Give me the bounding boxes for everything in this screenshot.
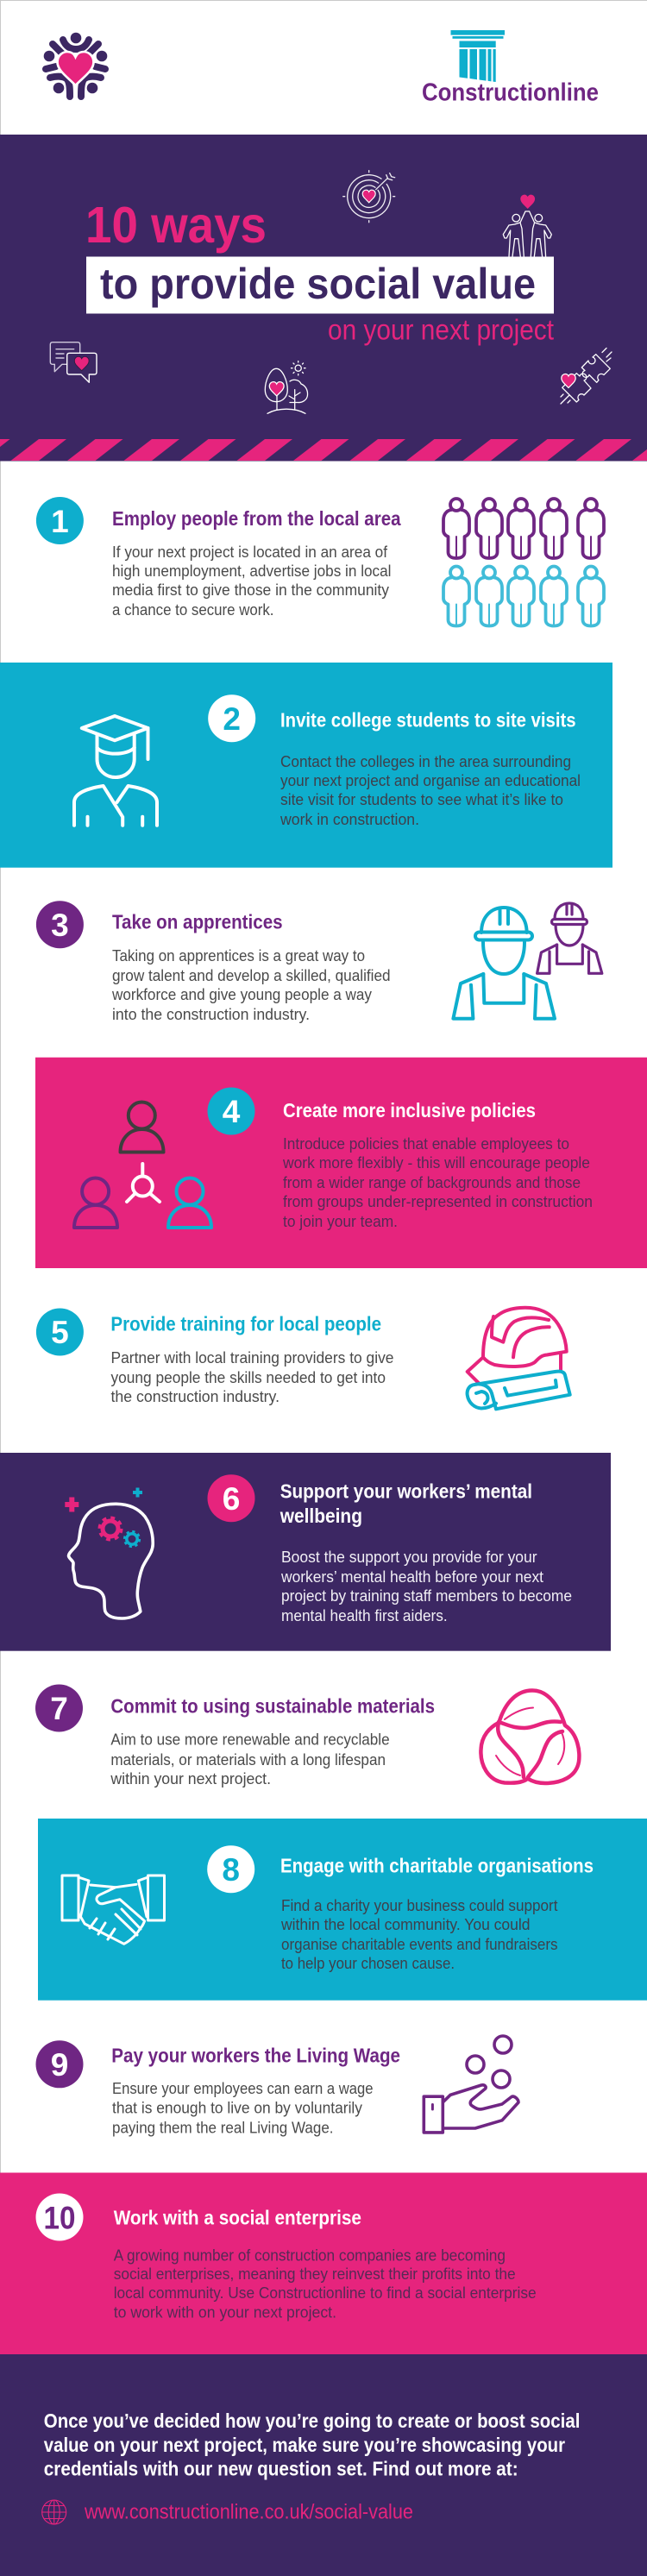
logo: Constructionline — [422, 30, 599, 106]
badge 4 — [207, 1087, 255, 1135]
icon: recycled leaves — [481, 1691, 579, 1783]
heading 2: Invite college students to site visits — [280, 709, 576, 732]
body 10: local community. Use Constructionline to find a social enterprise — [114, 2284, 537, 2302]
body 2: your next project and organise an educational — [280, 771, 581, 789]
panel: step 5 — [36, 1308, 570, 1409]
icon: construction workers — [453, 903, 602, 1019]
body 8: Find a charity your business could support — [281, 1896, 557, 1914]
logo: community heart — [44, 33, 107, 97]
badge 5 — [36, 1308, 84, 1356]
body 9: that is enough to live on by voluntarily — [112, 2098, 363, 2116]
heading 9: Pay your workers the Living Wage — [111, 2045, 400, 2067]
body 5 — [110, 1348, 393, 1405]
footer text: Once you’ve decided how you’re going to create or boost social — [44, 2410, 580, 2432]
body 9: Ensure your employees can earn a wage — [112, 2079, 373, 2097]
body 2 — [280, 752, 581, 828]
badge 6 — [207, 1474, 255, 1522]
body 1: media first to give those in the community — [112, 581, 390, 599]
panel: step 4 — [35, 1058, 647, 1268]
body 4: work more flexibly - this will encourage people — [282, 1153, 590, 1172]
body 7: Aim to use more renewable and recyclable — [110, 1731, 390, 1749]
body 6 — [280, 1548, 572, 1624]
body 10: social enterprises, meaning they reinvest their profits into the — [114, 2265, 516, 2283]
body 8: within the local community. You could — [280, 1915, 530, 1933]
badge 7 — [35, 1684, 83, 1732]
body 5: Partner with local training providers to give — [110, 1348, 393, 1367]
panel: footer — [0, 2354, 647, 2576]
body 2: site visit for students to see what it’s like to — [280, 790, 563, 808]
badge 3: 3 — [51, 908, 69, 943]
footer text: credentials with our new question set. Find out more at: — [44, 2458, 518, 2480]
hazard stripes — [0, 439, 647, 461]
footer text — [44, 2410, 580, 2480]
icon: puzzle — [561, 349, 612, 404]
body 7 — [110, 1731, 390, 1787]
body 10: A growing number of construction companies are becoming — [114, 2246, 506, 2264]
body 3: Taking on apprentices is a great way to — [112, 946, 365, 964]
body 3: workforce and give young people a way — [111, 985, 373, 1003]
body 4 — [282, 1134, 593, 1230]
title box: to provide social value — [100, 260, 536, 308]
body 1 — [112, 543, 392, 619]
heading 3: Take on apprentices — [112, 911, 283, 933]
badge 10: 10 — [43, 2200, 76, 2236]
panel: step 3 — [36, 901, 602, 1023]
icon: target — [343, 171, 395, 223]
heading 4: Create more inclusive policies — [283, 1099, 536, 1122]
body 3 — [111, 946, 391, 1023]
body 6: project by training staff members to become — [281, 1586, 572, 1605]
body 9 — [112, 2079, 373, 2136]
body 10 — [114, 2246, 537, 2321]
body 4: from groups under-represented in construction — [283, 1192, 593, 1210]
icon: trees — [265, 361, 308, 413]
link: www.constructionline.co.uk/social-value — [84, 2500, 413, 2524]
body 4: to join your team. — [283, 1212, 398, 1230]
panel: step 2 — [0, 663, 612, 868]
icon: handshake — [62, 1875, 164, 1944]
icon: graduate — [74, 716, 157, 826]
badge 1 — [36, 497, 84, 544]
heading 6 — [280, 1480, 532, 1527]
badge 7: 7 — [50, 1691, 68, 1726]
heading 6: wellbeing — [280, 1505, 362, 1527]
body 7: materials, or materials with a long lifespan — [110, 1750, 386, 1769]
panel: step 9 — [36, 2036, 518, 2136]
panel: step 10 — [0, 2172, 647, 2354]
badge 2 — [208, 694, 255, 742]
body 5: young people the skills needed to get into — [110, 1368, 386, 1386]
footer text: value on your next project, make sure you’re showcasing your — [44, 2434, 565, 2456]
heading 8: Engage with charitable organisations — [280, 1855, 594, 1877]
panel: step 8 — [38, 1819, 647, 2001]
heading 10: Work with a social enterprise — [114, 2206, 361, 2228]
body 8 — [280, 1896, 557, 1972]
logo: Constructionline: Constructionline — [422, 79, 599, 106]
panel: step 6 — [0, 1453, 611, 1651]
badge 3 — [36, 901, 84, 948]
badge 9: 9 — [51, 2047, 68, 2083]
badge 4: 4 — [223, 1094, 241, 1129]
title: 10 ways: 10 ways — [85, 197, 267, 254]
heading 6: Support your workers’ mental — [280, 1480, 532, 1503]
body 6: Boost the support you provide for your — [281, 1548, 537, 1566]
icon: globe — [42, 2500, 66, 2524]
body 3: into the construction industry. — [112, 1005, 310, 1023]
badge 5: 5 — [51, 1315, 69, 1350]
body 8: to help your chosen cause. — [281, 1954, 455, 1972]
badge 1: 1 — [51, 504, 69, 539]
heading 5: Provide training for local people — [110, 1313, 381, 1335]
badge 6: 6 — [223, 1481, 240, 1517]
heading 1: Employ people from the local area — [112, 507, 401, 530]
body 9: paying them the real Living Wage. — [112, 2118, 333, 2136]
panel: step 7 — [35, 1684, 579, 1787]
body 1: If your next project is located in an area of — [112, 543, 388, 561]
body 2: Contact the colleges in the area surrounding — [280, 752, 571, 770]
subtitle: on your next project — [328, 314, 554, 346]
badge 8: 8 — [222, 1852, 240, 1888]
body 4: from a wider range of backgrounds and those — [283, 1173, 581, 1191]
body 4: Introduce policies that enable employees to — [283, 1134, 569, 1153]
badge 2: 2 — [223, 701, 241, 737]
icon: speech bubbles — [50, 342, 97, 382]
icon: high five — [503, 195, 551, 257]
icon: hard hat and plans — [468, 1308, 570, 1409]
body 6: workers’ mental health before your next — [280, 1568, 543, 1586]
body 2: work in construction. — [280, 810, 419, 828]
body 10: to work with on your next project. — [114, 2303, 336, 2321]
badge 8 — [207, 1845, 254, 1893]
body 8: organise charitable events and fundraisers — [281, 1935, 557, 1953]
panel: hero — [0, 135, 647, 461]
heading 7: Commit to using sustainable materials — [110, 1695, 435, 1718]
panel: step 1 — [36, 497, 604, 626]
icon: hand with coins — [424, 2036, 518, 2133]
badge 9 — [36, 2040, 83, 2088]
body 6: mental health first aiders. — [281, 1606, 448, 1624]
icon: connected people — [74, 1103, 211, 1228]
icon: head with gears — [65, 1487, 153, 1618]
body 3: grow talent and develop a skilled, qualified — [112, 966, 391, 984]
body 7: within your next project. — [110, 1769, 271, 1787]
body 1: high unemployment, advertise jobs in local — [112, 562, 392, 580]
body 1: a chance to secure work. — [112, 600, 274, 619]
badge 10 — [36, 2193, 83, 2241]
body 5: the construction industry. — [110, 1387, 280, 1405]
icon: people group — [443, 499, 604, 626]
